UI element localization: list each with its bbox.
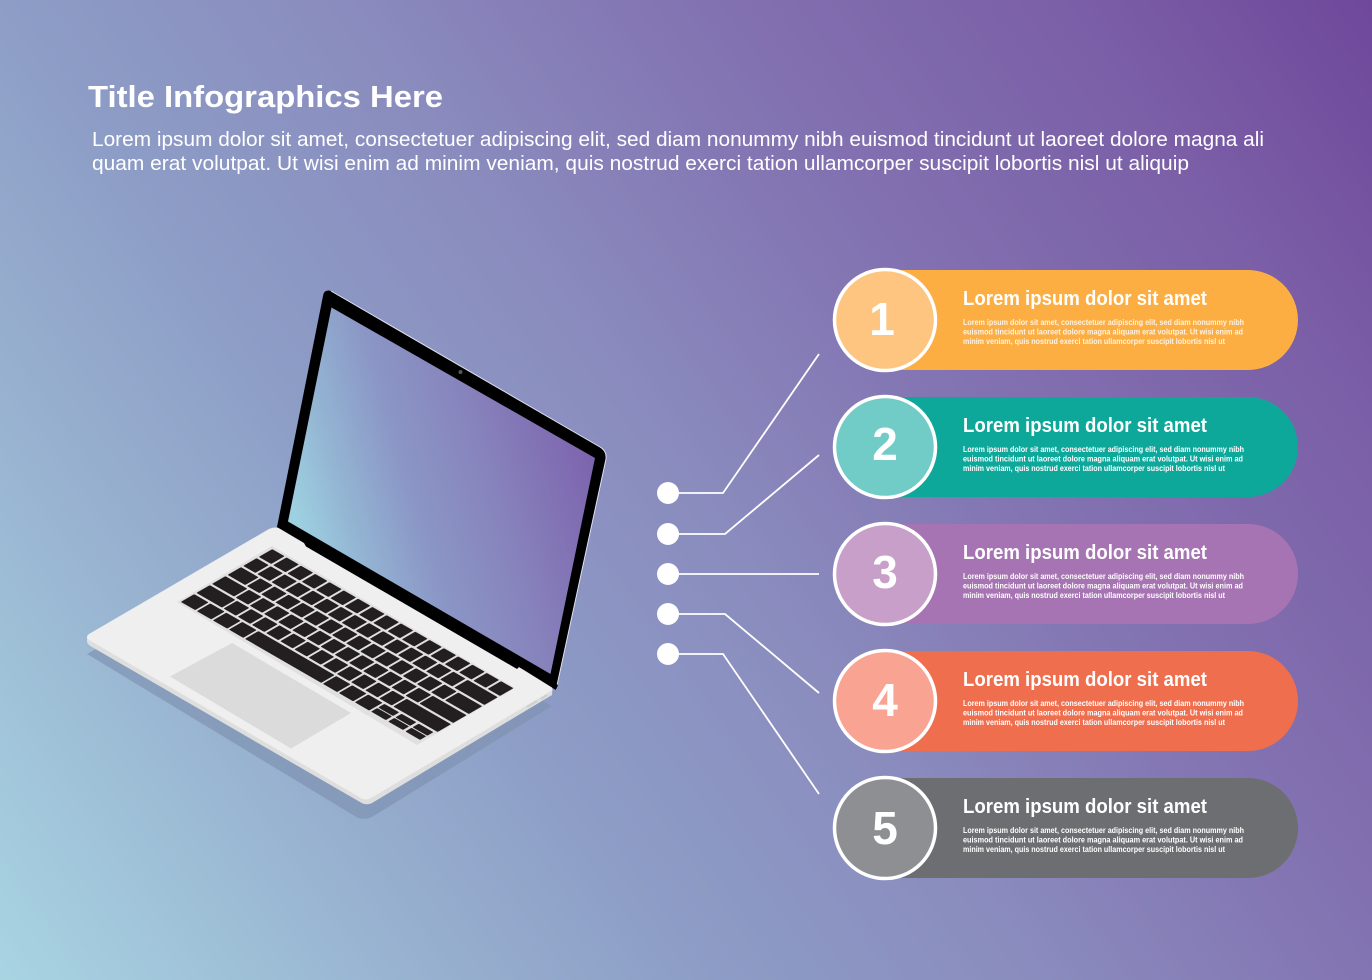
number 3: 3 <box>872 546 898 598</box>
badge 4 <box>834 650 936 752</box>
intro paragraph: Lorem ipsum dolor sit amet, consectetuer adipiscing elit, sed diam nonummy nibh euismod tincidunt ut laoreet dolore magna ali <box>92 128 1264 151</box>
side ports <box>527 695 547 707</box>
badge 2 <box>834 396 936 498</box>
heading 2: Lorem ipsum dolor sit amet <box>963 415 1207 437</box>
body 3: Lorem ipsum dolor sit amet, consectetuer adipiscing elit, sed diam nonummy nibh <box>963 571 1244 581</box>
laptop illustration <box>87 291 606 819</box>
laptop base <box>87 522 558 804</box>
item 4 <box>834 650 1298 752</box>
body 3 <box>963 571 1244 600</box>
body 5 <box>963 825 1244 854</box>
trackpad <box>170 643 351 748</box>
body 3: minim veniam, quis nostrud exerci tation ullamcorper suscipit lobortis nisl ut <box>963 590 1225 600</box>
item 5 <box>834 778 1298 878</box>
body 5: minim veniam, quis nostrud exerci tation ullamcorper suscipit lobortis nisl ut <box>963 844 1225 854</box>
connector lines <box>668 354 819 794</box>
body 2: minim veniam, quis nostrud exerci tation ullamcorper suscipit lobortis nisl ut <box>963 463 1225 473</box>
body 1 <box>963 317 1244 346</box>
body 2: euismod tincidunt ut laoreet dolore magna aliquam erat volutpat. Ut wisi enim ad <box>963 454 1243 464</box>
item 1 <box>834 270 1298 370</box>
heading 4: Lorem ipsum dolor sit amet <box>963 669 1207 691</box>
heading 5: Lorem ipsum dolor sit amet <box>963 796 1207 818</box>
pill 4 <box>885 651 1298 751</box>
body 5: Lorem ipsum dolor sit amet, consectetuer adipiscing elit, sed diam nonummy nibh <box>963 825 1244 835</box>
keys <box>182 550 512 740</box>
connector dots <box>657 482 679 665</box>
item 2 <box>834 396 1298 498</box>
intro paragraph: quam erat volutpat. Ut wisi enim ad minim veniam, quis nostrud exerci tation ullamcorper suscipit lobortis nisl ut aliquip <box>92 152 1189 175</box>
number 4: 4 <box>872 674 898 726</box>
body 2: Lorem ipsum dolor sit amet, consectetuer adipiscing elit, sed diam nonummy nibh <box>963 444 1244 454</box>
hinge <box>277 522 558 690</box>
number 5: 5 <box>872 802 898 854</box>
number 1: 1 <box>869 293 895 345</box>
pill 1 <box>885 270 1298 370</box>
title: Title Infographics Here <box>88 79 443 114</box>
body 4: minim veniam, quis nostrud exerci tation ullamcorper suscipit lobortis nisl ut <box>963 717 1225 727</box>
keyboard well <box>177 546 515 745</box>
laptop shadow <box>87 548 552 819</box>
badge 1 <box>834 270 936 370</box>
body 4 <box>963 698 1244 727</box>
body 1: minim veniam, quis nostrud exerci tation ullamcorper suscipit lobortis nisl ut <box>963 336 1225 346</box>
pill 3 <box>885 524 1298 624</box>
body 4: euismod tincidunt ut laoreet dolore magna aliquam erat volutpat. Ut wisi enim ad <box>963 708 1243 718</box>
intro paragraph <box>92 128 1264 175</box>
body 4: Lorem ipsum dolor sit amet, consectetuer adipiscing elit, sed diam nonummy nibh <box>963 698 1244 708</box>
pill 2 <box>885 397 1298 497</box>
item 3 <box>834 524 1298 624</box>
body 1: Lorem ipsum dolor sit amet, consectetuer adipiscing elit, sed diam nonummy nibh <box>963 317 1244 327</box>
pill 5 <box>885 778 1298 878</box>
keyboard <box>177 546 515 745</box>
heading 3: Lorem ipsum dolor sit amet <box>963 542 1207 564</box>
badge 3 <box>834 524 936 624</box>
number 2: 2 <box>872 418 898 470</box>
body 1: euismod tincidunt ut laoreet dolore magna aliquam erat volutpat. Ut wisi enim ad <box>963 326 1243 336</box>
heading 1: Lorem ipsum dolor sit amet <box>963 288 1207 310</box>
body 5: euismod tincidunt ut laoreet dolore magna aliquam erat volutpat. Ut wisi enim ad <box>963 834 1243 844</box>
webcam <box>458 370 462 374</box>
laptop screen <box>277 291 606 690</box>
body 3: euismod tincidunt ut laoreet dolore magna aliquam erat volutpat. Ut wisi enim ad <box>963 580 1243 590</box>
badge 5 <box>834 778 936 878</box>
body 2 <box>963 444 1244 473</box>
